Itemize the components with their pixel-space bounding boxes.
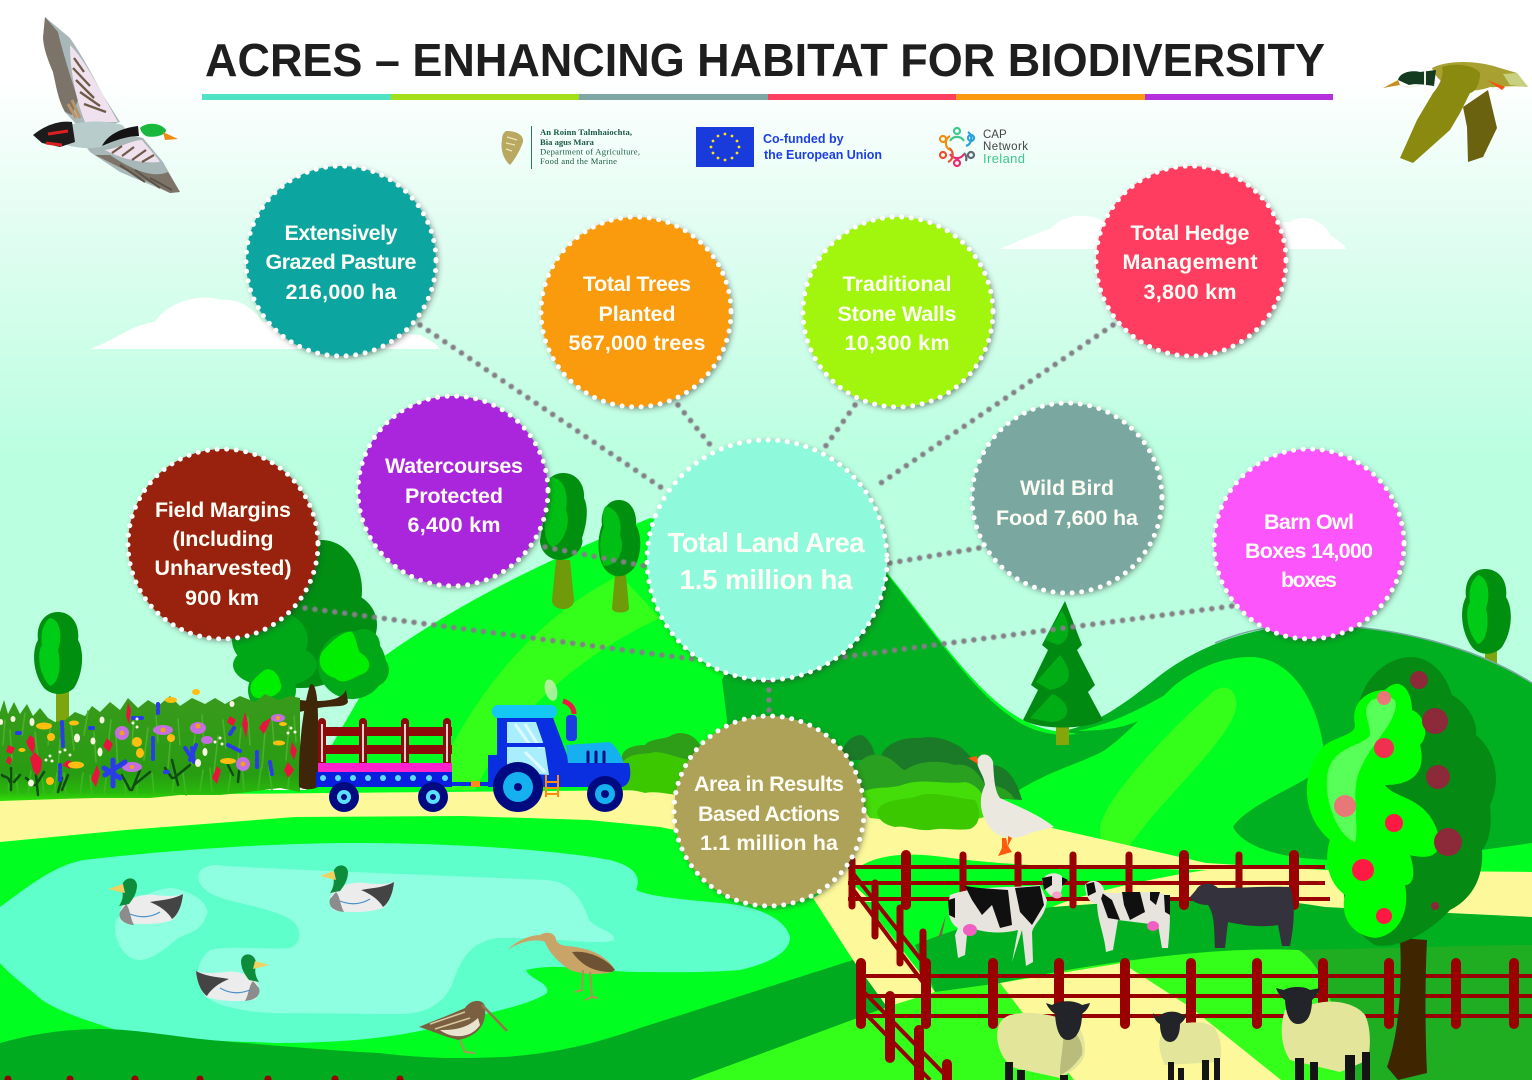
circle: area in results based actions: 1.1 million ha [700,831,839,855]
distant tree: right [1462,569,1511,685]
snipe [419,1001,507,1053]
trailer rails [318,722,452,764]
circle: field margins: Field Margins [155,498,291,522]
logo: department of agriculture: Food and the Marine [540,156,617,166]
sheep: right [1276,987,1370,1080]
poplar tree: left of centre [540,473,587,609]
circle: total land area [647,440,887,680]
cow: black angus [1190,884,1294,948]
circle: traditional stone walls: Traditional [842,272,952,296]
circle: field margins: Unharvested) [154,556,292,580]
circle: barn owl boxes: boxes [1281,568,1337,592]
logo: co-funded by the EU: the European Union [764,148,882,162]
circle: field margins: 900 km [185,586,259,610]
logo: department of agriculture: Bia agus Mara [540,137,595,147]
logo: CAP network ireland: CAP [983,129,1007,141]
circle: extensively grazed pasture: Grazed Pasture [266,250,417,274]
circle: total land area: 1.5 million ha [680,564,853,595]
white flower buds [0,701,296,786]
circle: traditional stone walls [803,217,993,407]
ground and paths [0,790,1532,1080]
circle: wild bird food: Wild Bird [1020,476,1114,500]
left hill [300,518,1170,810]
small fence tips at bottom edge [8,1079,400,1080]
flower centres [120,716,280,769]
circle: total hedge management [1096,166,1286,356]
circle: extensively grazed pasture: Extensively [284,221,398,245]
cloud: right [1000,216,1346,249]
circle: watercourses protected: Protected [405,484,503,508]
rainbow divider bar [202,94,1333,100]
sheep: middle [1153,1012,1221,1080]
cloud: left [90,298,440,349]
pine tree [1023,601,1103,745]
right hill [1040,625,1532,900]
tractor wheels [493,762,623,812]
dark leaves [2,760,240,795]
sheep: left [997,1001,1090,1080]
pond [0,843,790,1043]
circle: watercourses protected: Watercourses [385,454,523,478]
blue flowers [17,704,272,786]
cow: holstein right [1085,881,1170,952]
grass blades [2,711,296,797]
circle: total hedge management: 3,800 km [1144,280,1236,304]
logo: CAP network ireland [940,128,1028,166]
oak tree [232,540,389,714]
circle: barn owl boxes: Barn Owl [1264,510,1354,534]
circle: traditional stone walls: 10,300 km [844,331,950,355]
circle: watercourses protected [358,396,548,586]
yellow flowers [18,689,287,785]
circle: area in results based actions: Area in Results [694,772,844,796]
circle: wild bird food: Food 7,600 ha [996,506,1139,530]
circle: total land area: Total Land Area [668,527,865,558]
circle: total trees planted [541,217,731,407]
mallard swimming: bottom [196,954,269,1001]
sky background [0,0,1532,760]
logo: co-funded by the EU: Co-funded by [763,132,844,146]
circle: area in results based actions: Based Actions [698,802,840,826]
apples [1334,671,1462,924]
logo: CAP network ireland: Network [983,141,1028,153]
distant tree: left [34,612,82,725]
circle: barn owl boxes: Boxes 14,000 [1245,539,1373,563]
bottom dark ground [0,960,887,1080]
logo: CAP network ireland: Ireland [983,151,1025,166]
circle: total trees planted: 567,000 trees [568,331,706,355]
circle: field margins [128,449,318,639]
apple tree [1307,657,1496,1080]
poplar tree: right of first [598,500,640,612]
right hill bright pasture [1000,657,1532,890]
oak tree trunk [299,684,318,789]
circle: traditional stone walls: Stone Walls [838,302,957,326]
dotted connector lines [305,325,1240,715]
cow: holstein left [938,873,1068,966]
upper fence [848,855,1330,985]
purple flowers [115,714,285,772]
tractor and trailer [316,678,630,812]
circle: total hedge management: Total Hedge [1130,221,1250,245]
circle: barn owl boxes [1214,449,1404,639]
circle: extensively grazed pasture [246,166,436,356]
bushes: right of circle [840,735,1022,830]
logo: department of agriculture [501,126,640,169]
tractor body [488,678,630,797]
hitch [452,781,490,787]
goose [968,754,1054,856]
curlew [507,933,615,1000]
circle: area in results based actions [674,716,864,906]
logo: co-funded by the EU [696,127,882,167]
trailer wheels [329,782,448,812]
circle: extensively grazed pasture: 216,000 ha [286,280,398,304]
logo: department of agriculture: Department of Agriculture, [540,146,640,156]
bird: flying goose [1383,62,1528,163]
circle: total trees planted: Total Trees [583,272,691,296]
logo: department of agriculture: An Roinn Talmhaíochta, [540,127,632,137]
red flowers [6,702,297,787]
trailer deck [316,763,452,787]
bird: flying mallard [33,17,180,193]
wildflower meadow [0,689,300,801]
circle: watercourses protected: 6,400 km [408,513,500,537]
lower fence [858,963,1532,1080]
circle: total trees planted: Planted [598,302,676,326]
mallard swimming: left [108,878,183,925]
title: ACRES – ENHANCING HABITAT FOR BIODIVERSITY [205,34,1325,86]
mallard swimming: top [320,865,394,912]
circle: total hedge management: Management [1122,250,1258,274]
bushes: left of circle [622,733,700,795]
circle: wild bird food [972,403,1162,593]
circle: field margins: (Including [172,527,274,551]
